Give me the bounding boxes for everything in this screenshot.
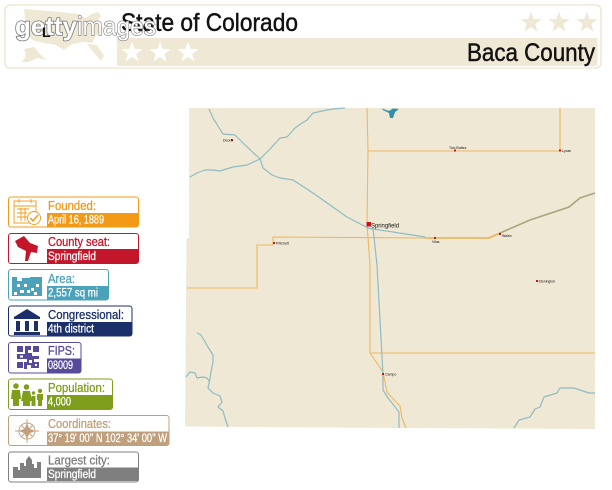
roads (187, 108, 595, 428)
town: Springfield: Springfield (371, 222, 399, 230)
town: Vilas: Vilas (432, 240, 440, 244)
value: 08009 (48, 360, 73, 372)
heading: Largest city: (48, 452, 110, 468)
town: Two Buttes: Two Buttes (449, 146, 467, 150)
watermark (15, 11, 156, 41)
county map (185, 108, 595, 429)
town: Lycan: Lycan (562, 149, 571, 153)
town: Stonington: Stonington (538, 280, 555, 284)
header initial: L (42, 24, 51, 40)
town: Vilas (432, 237, 440, 244)
subtitle: Baca County (467, 39, 595, 67)
icon: compass rose (15, 419, 39, 443)
panel: founded (8, 197, 138, 227)
icon: county shape (15, 236, 38, 261)
panel: congressional (8, 306, 132, 336)
map land (185, 108, 595, 429)
heading: Founded: (48, 198, 96, 213)
value: 4,000 (48, 396, 71, 408)
value: 37° 19' 00'' N 102° 34' 00'' W (48, 433, 167, 445)
heading: County seat: (48, 234, 110, 249)
icon: skyline (13, 456, 41, 478)
town: Walsh (499, 233, 512, 238)
panel: county seat (8, 234, 138, 264)
panel: largest city (8, 452, 138, 482)
value: April 16, 1889 (48, 214, 104, 226)
heading: Congressional: (48, 307, 124, 322)
panel: coordinates (8, 416, 169, 446)
icon: QR code (17, 346, 39, 369)
title: State of Colorado (121, 9, 298, 37)
heading: Population: (48, 380, 105, 395)
value: 2,557 sq mi (48, 288, 98, 300)
header banner (5, 5, 601, 68)
icon: calendar (14, 199, 40, 224)
heading: Area: (48, 271, 75, 286)
panel: area (8, 270, 108, 300)
panel: fips (8, 342, 81, 373)
watermark: getty (15, 11, 78, 41)
heading: Coordinates: (48, 416, 111, 431)
value: 4th district (48, 324, 95, 336)
town: Pritchett: Pritchett (276, 242, 289, 246)
watermark: images (77, 11, 156, 41)
icon: white stars (122, 42, 198, 62)
town: Deora: Deora (223, 138, 233, 142)
icon: USA silhouette (22, 9, 104, 62)
panel: population (8, 379, 112, 410)
value: Springfield (48, 251, 96, 263)
icon: beige stars (520, 12, 598, 32)
value: Springfield (48, 469, 96, 481)
icon: family (11, 383, 43, 406)
icon: capitol building (14, 309, 40, 335)
icon: area grid (12, 277, 42, 296)
town: Walsh: Walsh (502, 234, 512, 238)
rivers (186, 108, 595, 428)
heading: FIPS: (48, 343, 75, 358)
town: Campo: Campo (385, 372, 396, 376)
